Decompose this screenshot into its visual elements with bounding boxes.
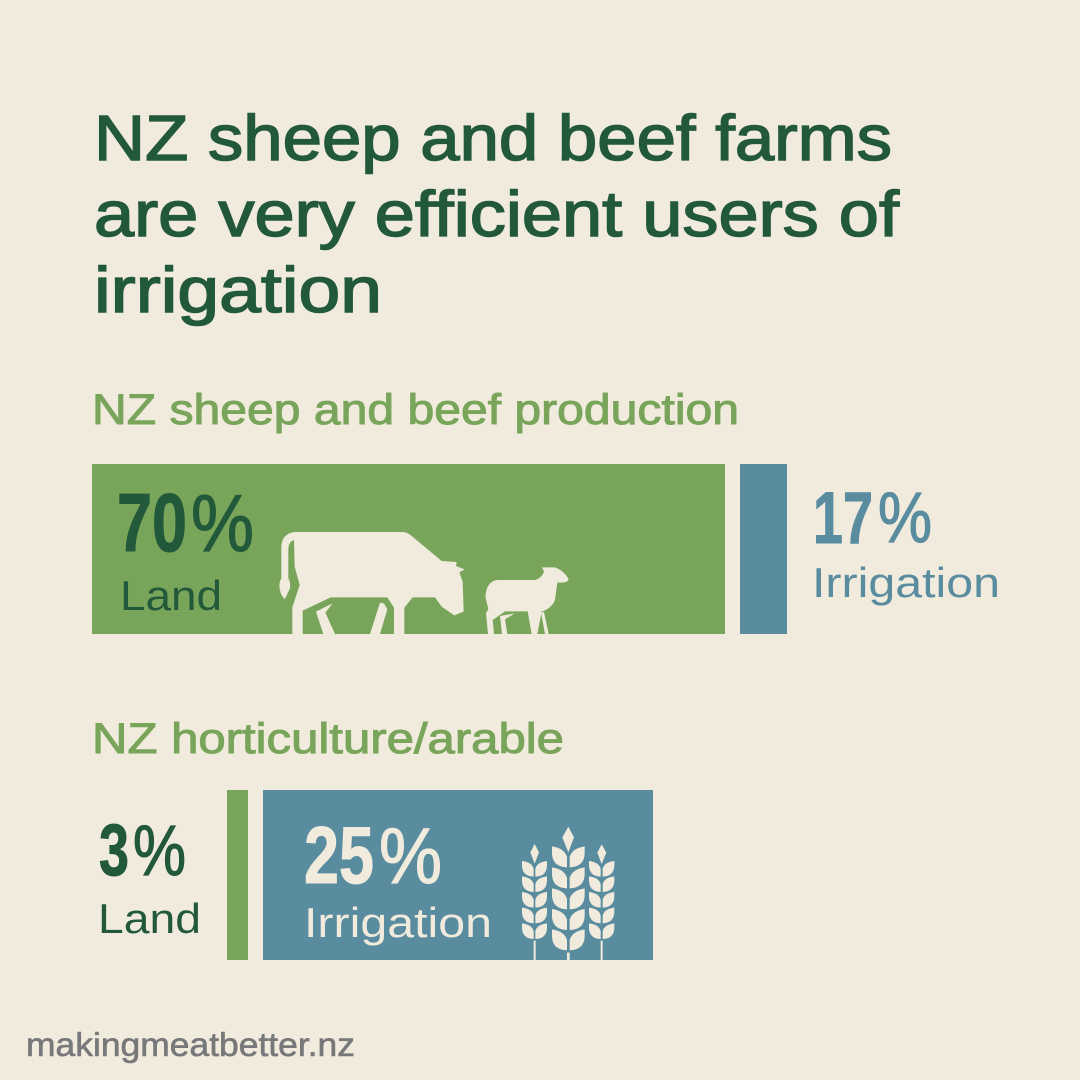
stat: 17% irrigation	[812, 478, 1000, 606]
stat: 3% land	[98, 810, 201, 942]
stat: 25% irrigation: %	[379, 811, 442, 900]
stat: 70% land: Land	[120, 572, 222, 619]
stat: 70% land: 70	[117, 476, 187, 569]
title: are very efficient users of	[94, 178, 899, 250]
panel: sheep and beef land bar	[92, 464, 725, 634]
title	[94, 102, 899, 326]
stat: 70% land	[117, 476, 254, 619]
title: NZ sheep and beef farms	[94, 102, 892, 174]
panel: sheep and beef irrigation bar	[740, 464, 787, 634]
heading: NZ sheep and beef production: NZ sheep and beef production	[92, 386, 739, 434]
panel: horticulture land bar	[227, 790, 248, 960]
footer: website: makingmeatbetter.nz	[26, 1026, 355, 1063]
stat: 25% irrigation	[304, 811, 492, 946]
stat: 17% irrigation: Irrigation	[812, 559, 1000, 606]
stat: 3% land: 3	[99, 810, 129, 891]
stat: 25% irrigation: Irrigation	[304, 899, 492, 946]
title: irrigation	[94, 254, 382, 326]
heading: NZ horticulture/arable: NZ horticulture/arable	[92, 715, 564, 763]
panel: horticulture irrigation bar	[263, 790, 653, 960]
stat: 3% land: Land	[98, 895, 201, 942]
stat: 17% irrigation: 17	[813, 478, 873, 559]
stat: 17% irrigation: %	[878, 479, 932, 558]
stat: 25% irrigation: 25	[304, 811, 374, 901]
icon: wheat	[522, 827, 614, 960]
stat: 70% land: %	[191, 479, 254, 569]
icon: cow	[279, 532, 465, 634]
stat: 3% land: %	[133, 812, 186, 891]
icon: sheep	[485, 567, 569, 634]
